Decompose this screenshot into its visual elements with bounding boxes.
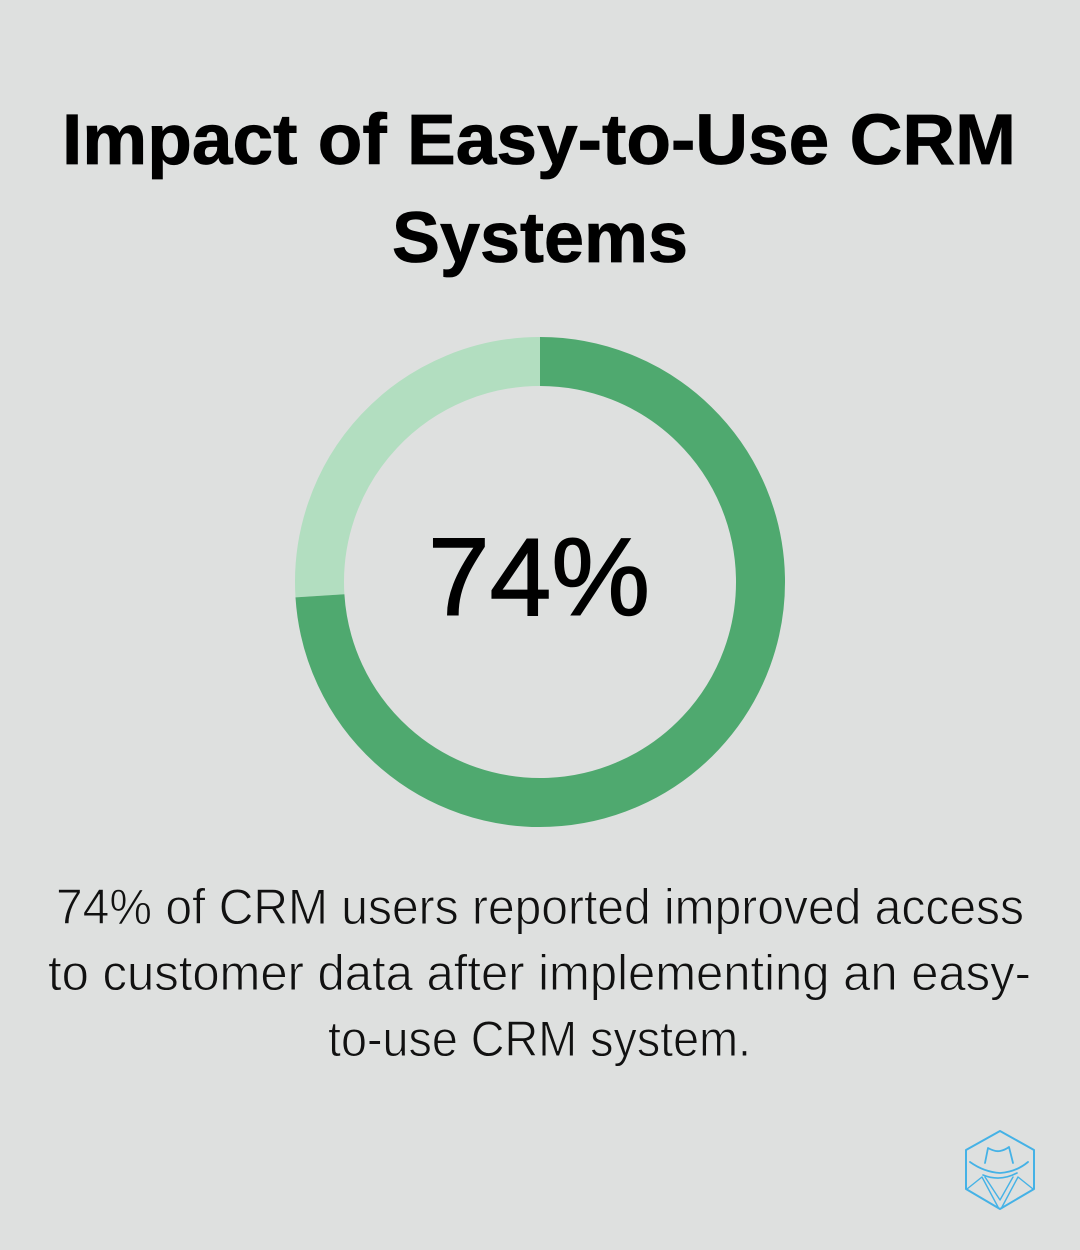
donut remainder segment — [320, 362, 540, 596]
icon: hexagon logo with hat figure — [966, 1131, 1034, 1209]
title: Systems — [392, 199, 688, 278]
donut chart: 74% — [320, 362, 761, 802]
title — [62, 101, 1016, 278]
donut center value: 74% — [428, 516, 650, 639]
title: Impact of Easy-to-Use CRM — [62, 101, 1016, 180]
donut value segment — [320, 362, 761, 802]
description text: to-use CRM system. — [328, 1011, 751, 1067]
description text: to customer data after implementing an easy- — [48, 945, 1031, 1001]
description text — [48, 879, 1031, 1067]
description text: 74% of CRM users reported improved access — [56, 879, 1024, 935]
